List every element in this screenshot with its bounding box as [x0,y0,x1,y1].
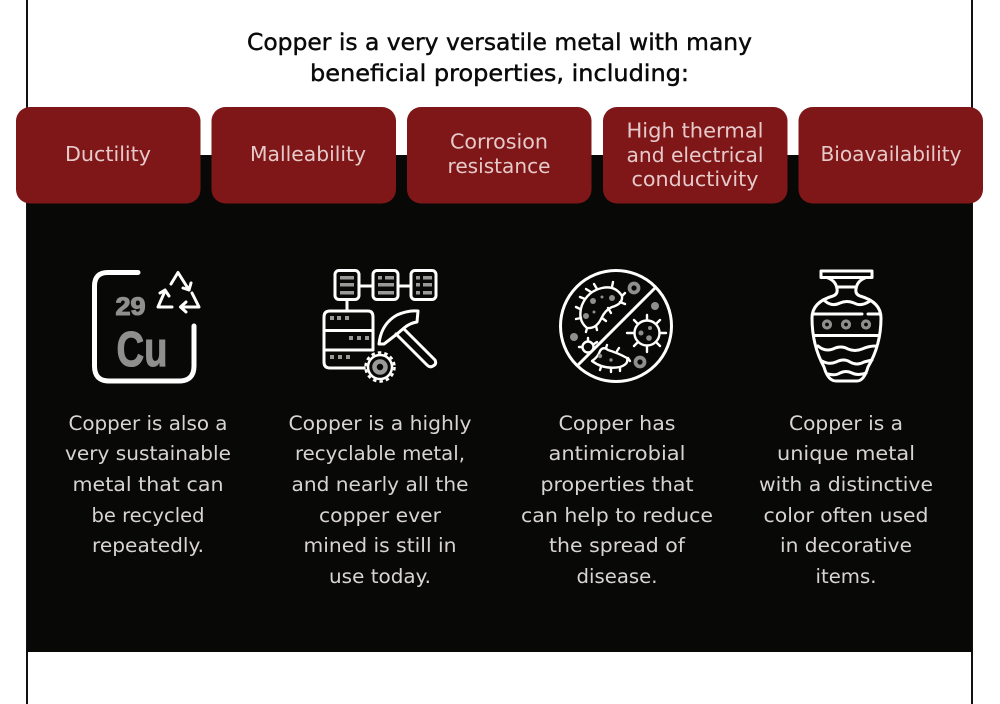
tab: thermal and electrical conductivity: conductivity [632,167,759,191]
text: decorative color: unique metal [777,442,915,465]
tab: thermal and electrical conductivity: and electrical [626,143,764,167]
icon: copper element with recycling symbol: 29 [116,293,146,321]
text: recyclability: and nearly all the [292,473,468,496]
text: recyclability [288,412,472,588]
tab: malleability: Malleability [250,142,366,166]
icon: copper element with recycling symbol: Cu [116,323,168,377]
text: antimicrobial: Copper has [558,412,676,435]
text: recyclability: use today. [329,565,431,588]
icon: copper element with recycling symbol [94,272,199,381]
text: decorative color: color often used [764,504,928,527]
text: antimicrobial: properties that [540,473,694,496]
text: decorative color: Copper is a [789,412,903,435]
tab: corrosion resistance: Corrosion [450,130,548,154]
text: decorative color: with a distinctive [759,473,933,496]
icon: mining data server and hammer [324,270,436,382]
tab: ductility: Ductility [65,142,151,166]
tab: bioavailability [798,107,983,204]
text: sustainability [65,412,231,557]
tab: thermal and electrical conductivity [603,107,788,204]
tab: thermal and electrical conductivity: High thermal [626,118,764,142]
text: sustainability: metal that can [72,473,224,496]
text: recyclability: recyclable metal, [295,442,465,465]
text: decorative color: in decorative [780,534,912,557]
text: sustainability: repeatedly. [92,534,204,557]
text: antimicrobial: can help to reduce [521,504,713,527]
text: recyclability: Copper is a highly [288,412,472,435]
tab: bioavailability: Bioavailability [820,142,962,166]
text: decorative color: items. [816,565,876,588]
text: antimicrobial: disease. [576,565,658,588]
text: recyclability: copper ever [319,504,442,527]
text: decorative color [759,412,933,588]
text: sustainability: very sustainable [65,442,231,465]
tab: malleability [212,107,396,204]
text: antimicrobial: antimicrobial [548,442,686,465]
text: sustainability: be recycled [92,504,204,527]
text: antimicrobial: the spread of [549,534,686,557]
text: sustainability: Copper is also a [68,412,228,435]
tab: ductility [16,107,200,204]
text: antimicrobial [521,412,713,588]
property tabs [16,107,983,204]
title: beneficial properties, including: [310,61,689,87]
black panel [27,155,972,652]
title [247,30,752,87]
title: Copper is a very versatile metal with many [247,30,752,56]
icon: decorative vase [812,271,881,381]
tab: corrosion resistance: resistance [448,154,550,178]
text: recyclability: mined is still in [304,534,456,557]
icon: no bacteria [560,270,672,382]
tab: corrosion resistance [407,107,592,204]
